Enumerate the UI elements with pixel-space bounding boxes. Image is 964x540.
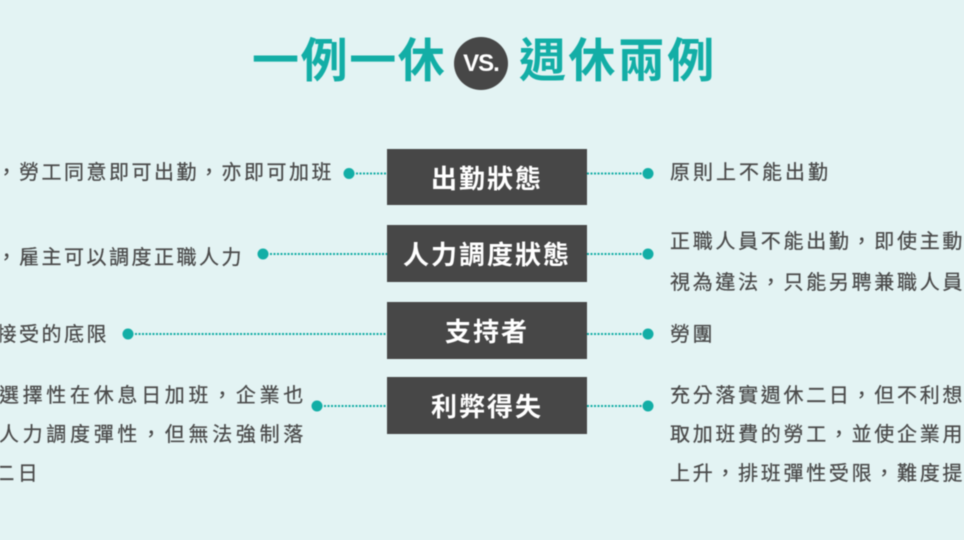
right text: staffing: 正職人員不能出勤，即使主動 (670, 225, 964, 254)
right text: staffing: 視為違法，只能另聘兼職人員 (670, 266, 964, 295)
vs badge (454, 37, 508, 90)
label box: 出勤狀態: 出勤狀態 (431, 164, 543, 194)
right text: pros and cons (670, 379, 964, 486)
left text: pros and cons (0, 379, 307, 486)
right text: pros and cons: 上升，排班彈性受限，難度提 (670, 457, 964, 486)
left text: attendance: ，勞工同意即可出勤，亦即可加班 (0, 156, 334, 185)
label box: 支持者 (387, 302, 587, 359)
title left: 一例一休: 一例一休 (252, 34, 446, 87)
right text: pros and cons: 取加班費的勞工，並使企業用 (670, 418, 964, 447)
label box: 利弊得失 (387, 377, 587, 434)
right text: staffing (670, 225, 964, 295)
label box: 利弊得失: 利弊得失 (431, 392, 543, 422)
label box: 人力調度狀態 (387, 225, 587, 282)
right text: pros and cons: 充分落實週休二日，但不利想 (670, 379, 964, 408)
label box: 支持者: 支持者 (445, 317, 529, 347)
left text: staffing: ，雇主可以調度正職人力 (0, 241, 244, 270)
title right: 週休兩例: 週休兩例 (519, 34, 717, 87)
right text: attendance: 原則上不能出勤 (670, 156, 831, 185)
vs badge: VS. (463, 50, 499, 77)
right text: supporters: 勞團 (670, 318, 715, 347)
label box: 出勤狀態 (387, 149, 587, 205)
label box: 人力調度狀態: 人力調度狀態 (403, 240, 571, 270)
